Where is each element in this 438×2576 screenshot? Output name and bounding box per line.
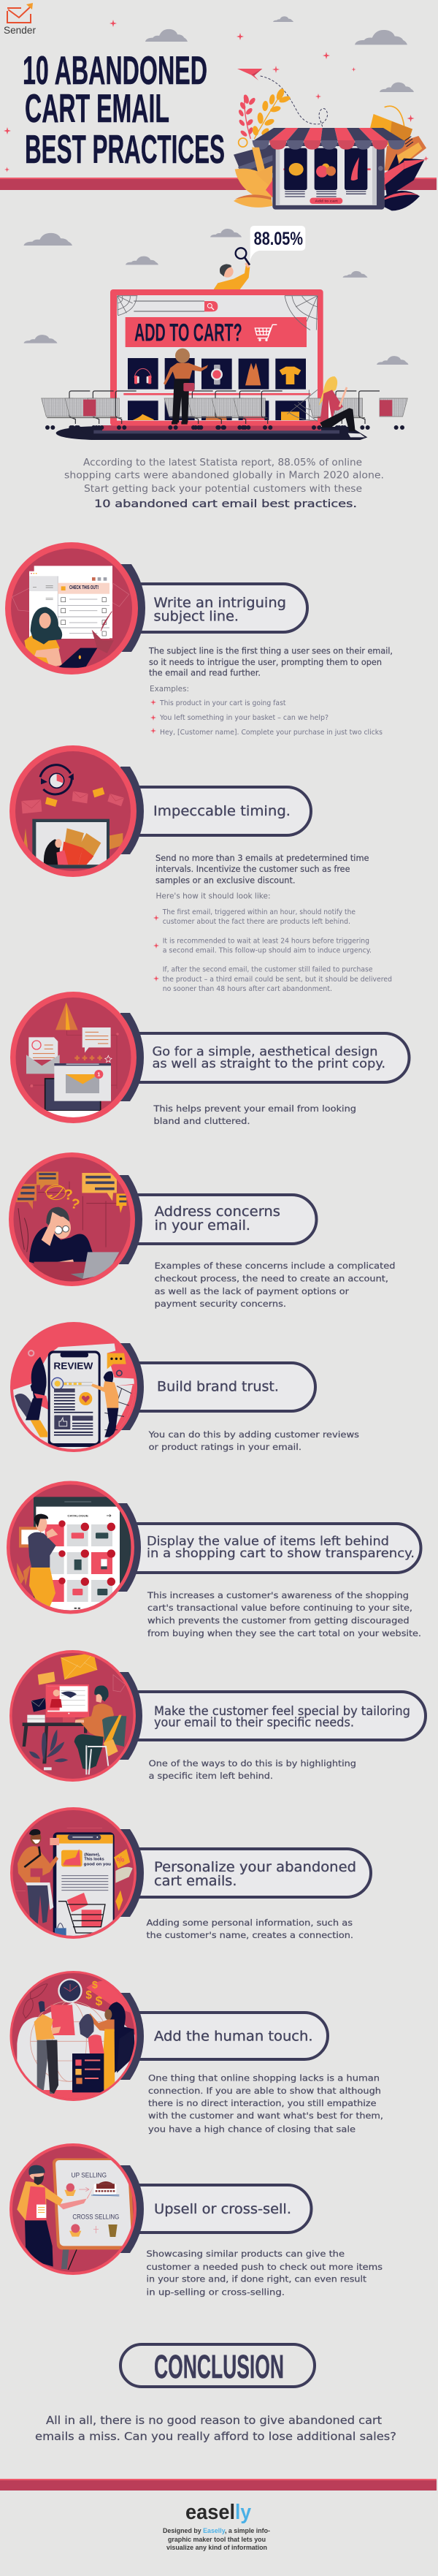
background clouds and sparkles	[4, 16, 429, 365]
awning	[253, 128, 405, 150]
body text	[153, 853, 392, 993]
illustration: phone and shopper	[10, 1807, 137, 1939]
illustration: worried man	[9, 1152, 135, 1286]
body text: Here's how it should look like:	[156, 892, 270, 900]
illustration: phone and shopper: (Name),	[84, 1853, 101, 1857]
intro paragraph	[64, 457, 384, 510]
plants and shopping bag behind the shop	[234, 88, 426, 173]
body text: This increases a customer's awareness of the shopping	[147, 1590, 409, 1600]
body text: a specific item left behind.	[149, 1771, 273, 1781]
logo: easelly: ly	[235, 2501, 251, 2524]
footer credit	[163, 2527, 270, 2551]
body text: You can do this by adding customer reviews	[147, 1429, 359, 1440]
body text: One thing that online shopping lacks is a human	[148, 2073, 380, 2083]
panel: tip 9 human touch	[10, 1971, 383, 2134]
footer credit: graphic maker tool that lets you	[168, 2536, 266, 2543]
body text: It is recommended to wait at least 24 hours before triggering	[163, 938, 369, 946]
illustration: timer, envelopes and coupons	[9, 745, 137, 877]
panel: tip 3 simple design	[10, 992, 409, 1126]
intro paragraph: Start getting back your potential customers with these	[84, 484, 362, 495]
crescent connector	[118, 1503, 141, 1592]
header red bar	[0, 178, 437, 190]
body text: with the customer and want what's best for them,	[148, 2110, 383, 2121]
body text: there is no direct interaction, you still empathize	[148, 2098, 377, 2108]
heading: Write an intriguing subject line: Write an intriguing	[153, 595, 286, 611]
heading: conclusion	[120, 2344, 315, 2387]
heading: Add the human touch: Add the human touch.	[154, 2028, 313, 2044]
body text: This helps prevent your email from looking	[153, 1103, 356, 1114]
panel: tip 8 personalize	[10, 1807, 371, 1940]
body text	[153, 1103, 356, 1126]
logo: Sender	[4, 3, 36, 36]
panel: tip 1 subject line	[5, 542, 393, 737]
crescent connector	[120, 1993, 144, 2080]
woman standing and pointing	[164, 349, 208, 425]
body text: bland and cluttered.	[153, 1116, 250, 1126]
body text: Adding some personal information, such as	[146, 1918, 353, 1928]
logo: Sender: Sender	[4, 24, 36, 36]
panel: tip 4 address concerns	[9, 1152, 396, 1309]
foliage in front of the shop	[234, 148, 426, 210]
body text	[155, 1261, 396, 1309]
heading: Make the customer feel special: your email to their specific needs.	[154, 1716, 354, 1730]
ground and laptop base	[56, 425, 367, 440]
heading: Build brand trust	[128, 1363, 315, 1411]
illustration: phone and shopper: This looks	[84, 1858, 104, 1862]
illustration: shop assistant and customer	[10, 1971, 137, 2101]
body text: Hey, [Customer name]. Complete your purchase in just two clicks	[160, 729, 383, 737]
title: 10 ABANDONED	[23, 48, 207, 93]
heading: Personalize your abandoned cart emails	[128, 1849, 371, 1897]
heading: Upsell or cross-sell	[128, 2185, 311, 2233]
illustration: man at desktop computer	[9, 1650, 136, 1782]
body text: This product in your cart is going fast	[159, 699, 286, 707]
crescent connector	[119, 1672, 142, 1760]
body text: as well as the lack of payment options or	[155, 1286, 349, 1296]
illustration: catalogue and thinking man: CATALOGUE	[67, 1513, 88, 1517]
illustration: presenter with up-selling board	[9, 2143, 137, 2275]
intro paragraph: 10 abandoned cart email best practices.	[94, 498, 357, 510]
heading: conclusion: CONCLUSION	[154, 2348, 284, 2385]
illustration: presenter with up-selling board: UP SELLING	[72, 2171, 107, 2178]
heading: Display the value of items	[128, 1524, 420, 1573]
illustration: email inbox and woman	[5, 542, 138, 675]
conclusion text	[35, 2414, 396, 2443]
illustration: shop assistant and customer: $	[96, 1994, 103, 2008]
body text: samples or an exclusive discount.	[155, 875, 295, 886]
body text	[148, 646, 393, 737]
crescent connector	[120, 1829, 144, 1917]
icon: white cart	[255, 324, 277, 341]
heading: Write an intriguing subject line: subject line.	[153, 608, 239, 624]
tablet storefront	[272, 143, 385, 210]
panel: tip 6 show transparency	[7, 1481, 421, 1638]
heading: Build brand trust: Build brand trust.	[157, 1379, 279, 1395]
illustration: abandoned laptop store with carts	[42, 226, 407, 440]
crescent connector	[120, 2165, 144, 2253]
panel: tip 5 brand trust	[9, 1322, 359, 1454]
heading: Upsell or cross-sell: Upsell or cross-sell.	[154, 2201, 291, 2217]
illustration: worried man: ?	[69, 1196, 81, 1213]
illustration: phone with review	[9, 1322, 137, 1454]
body text: connection. If you are able to show that although	[148, 2086, 381, 2096]
tablet storefront: Add to cart	[315, 200, 338, 204]
speech bubble: 88.05%	[250, 226, 305, 262]
body text: you have a high chance of closing that sale	[148, 2124, 356, 2134]
laptop screen	[110, 289, 323, 426]
body text: intervals. Incentivize the customer such as free	[155, 864, 350, 874]
body text: in up-selling or cross-selling.	[146, 2287, 285, 2298]
body text: You left something in your basket – can we help?	[159, 714, 328, 722]
body text: or product ratings in your email.	[149, 1442, 301, 1452]
body text: Examples:	[150, 684, 189, 694]
woman sitting on phone	[319, 376, 365, 437]
illustration: shop assistant and customer: $	[92, 1979, 98, 1991]
crescent connector	[120, 1343, 144, 1430]
body text: so it needs to intrigue the user, prompting them to open	[149, 657, 382, 667]
heading: Address concerns in your email: Address concerns	[155, 1204, 280, 1220]
heading: Address concerns in your email: in your email.	[155, 1217, 250, 1234]
body text: the customer's name, creates a connection.	[146, 1930, 353, 1940]
body text	[147, 1429, 359, 1452]
illustration: worried man: ?	[64, 1187, 73, 1204]
body text: If, after the second email, the customer still failed to purchase	[163, 966, 373, 973]
body text	[148, 2073, 383, 2134]
product tiles	[123, 358, 310, 420]
body text: in your store and, if done right, can even result	[146, 2274, 367, 2284]
heading: Make the customer feel special	[128, 1692, 426, 1740]
illustration: catalogue and thinking man	[7, 1481, 134, 1614]
magnifier person on top of the screen	[214, 248, 250, 289]
body text: a second email. This follow-up should aim to induce urgency.	[163, 947, 372, 955]
heading: Go for a simple design: Go for a simple, aesthetical design	[152, 1045, 378, 1060]
intro paragraph: shopping carts were abandoned globally in March 2020 alone.	[64, 471, 384, 481]
illustration: presenter with up-selling board: CROSS SELLING	[72, 2214, 119, 2221]
title: BEST PRACTICES	[25, 126, 225, 172]
crescent connector	[119, 1175, 142, 1264]
crescent connector	[120, 1013, 144, 1101]
conclusion text: emails a miss. Can you really afford to lose additional sales?	[35, 2430, 396, 2443]
body text	[146, 2249, 383, 2298]
laptop screen: ADD TO CART?	[134, 319, 242, 347]
body text: payment security concerns.	[155, 1299, 286, 1309]
conclusion text: All in all, there is no good reason to give abandoned cart	[46, 2414, 382, 2427]
intro paragraph: According to the latest Statista report, 88.05% of online	[83, 457, 362, 468]
body text: customer about the fact there are products left behind.	[163, 918, 350, 926]
body text: checkout process, the need to create an account,	[155, 1274, 388, 1284]
body text: the email and read further.	[149, 668, 261, 678]
panel: tip 10 upsell	[9, 2143, 383, 2298]
body text: which prevents the customer from getting discouraged	[147, 1615, 410, 1625]
cobwebs	[118, 296, 318, 422]
dashed flight path	[261, 76, 328, 126]
illustration: phone and shopper: %	[115, 1855, 126, 1866]
body text: no sooner than 48 hours after cart abandonment.	[163, 985, 332, 993]
body text: Examples of these concerns include a complicated	[155, 1261, 396, 1271]
illustration: email inbox and woman: CHECK THIS OUT!	[69, 585, 99, 590]
heading: Impeccable timing	[128, 787, 311, 835]
panel: tip 7 tailor email	[9, 1650, 426, 1782]
footer credit: Designed by Easelly, a simple info-	[163, 2527, 270, 2534]
crescent connector	[120, 564, 145, 652]
body text	[147, 1590, 421, 1638]
body text: The first email, triggered within an hour, should notify the	[162, 908, 356, 916]
illustration: online shop storefront	[234, 69, 426, 210]
heading: Display the value of items: in a shopping cart to show transparency.	[147, 1546, 415, 1561]
body text	[149, 1758, 356, 1781]
illustration: email design	[10, 992, 137, 1123]
body text: cart's transactional value before continuing to your site,	[147, 1603, 412, 1613]
body text: The subject line is the first thing a user sees on their email,	[148, 646, 393, 656]
heading: Add the human touch	[128, 2013, 328, 2059]
illustration: email design: 1	[97, 1071, 100, 1078]
heading: Display the value of items: Display the value of items left behind	[147, 1535, 389, 1549]
heading: Go for a simple design	[128, 1033, 409, 1082]
body text: One of the ways to do this is by highlighting	[149, 1758, 356, 1768]
footer red bar	[0, 2479, 437, 2490]
logo: easelly: easel	[185, 2501, 235, 2524]
body text: customer a needed push to check out more items	[146, 2262, 383, 2272]
heading: Make the customer feel special: Make the customer feel special by tailoring	[154, 1704, 410, 1719]
shopping carts row	[42, 391, 407, 430]
heading: Write an intriguing subject line	[131, 584, 307, 632]
body text: from buying when they see the cart total on your website.	[147, 1628, 421, 1638]
crescent connector	[120, 767, 144, 854]
heading: Impeccable timing: Impeccable timing.	[153, 803, 291, 819]
footer credit: visualize any kind of information	[166, 2544, 267, 2551]
body text: Showcasing similar products can give the	[146, 2249, 345, 2259]
body text: Send no more than 3 emails at predetermined time	[155, 853, 369, 863]
illustration: shop assistant and customer: $	[85, 1989, 92, 2002]
illustration: phone with review: REVIEW	[53, 1360, 93, 1371]
body text: the product – a third email could be sent, but it should be delivered	[163, 976, 392, 984]
heading: Personalize your abandoned cart emails: Personalize your abandoned	[154, 1859, 356, 1875]
speech bubble: 88.05%: 88.05%	[254, 229, 303, 249]
body text	[146, 1918, 353, 1940]
illustration: phone and shopper: good on you	[84, 1862, 112, 1866]
title: CART EMAIL	[25, 86, 169, 131]
heading: Go for a simple design: as well as straight to the print copy.	[152, 1057, 385, 1071]
heading: Address concerns in your email	[128, 1195, 317, 1244]
heading: Personalize your abandoned cart emails: cart emails.	[154, 1873, 237, 1889]
title	[23, 48, 225, 172]
panel: tip 2 timing	[9, 745, 392, 993]
icon: paper plane	[237, 69, 262, 80]
